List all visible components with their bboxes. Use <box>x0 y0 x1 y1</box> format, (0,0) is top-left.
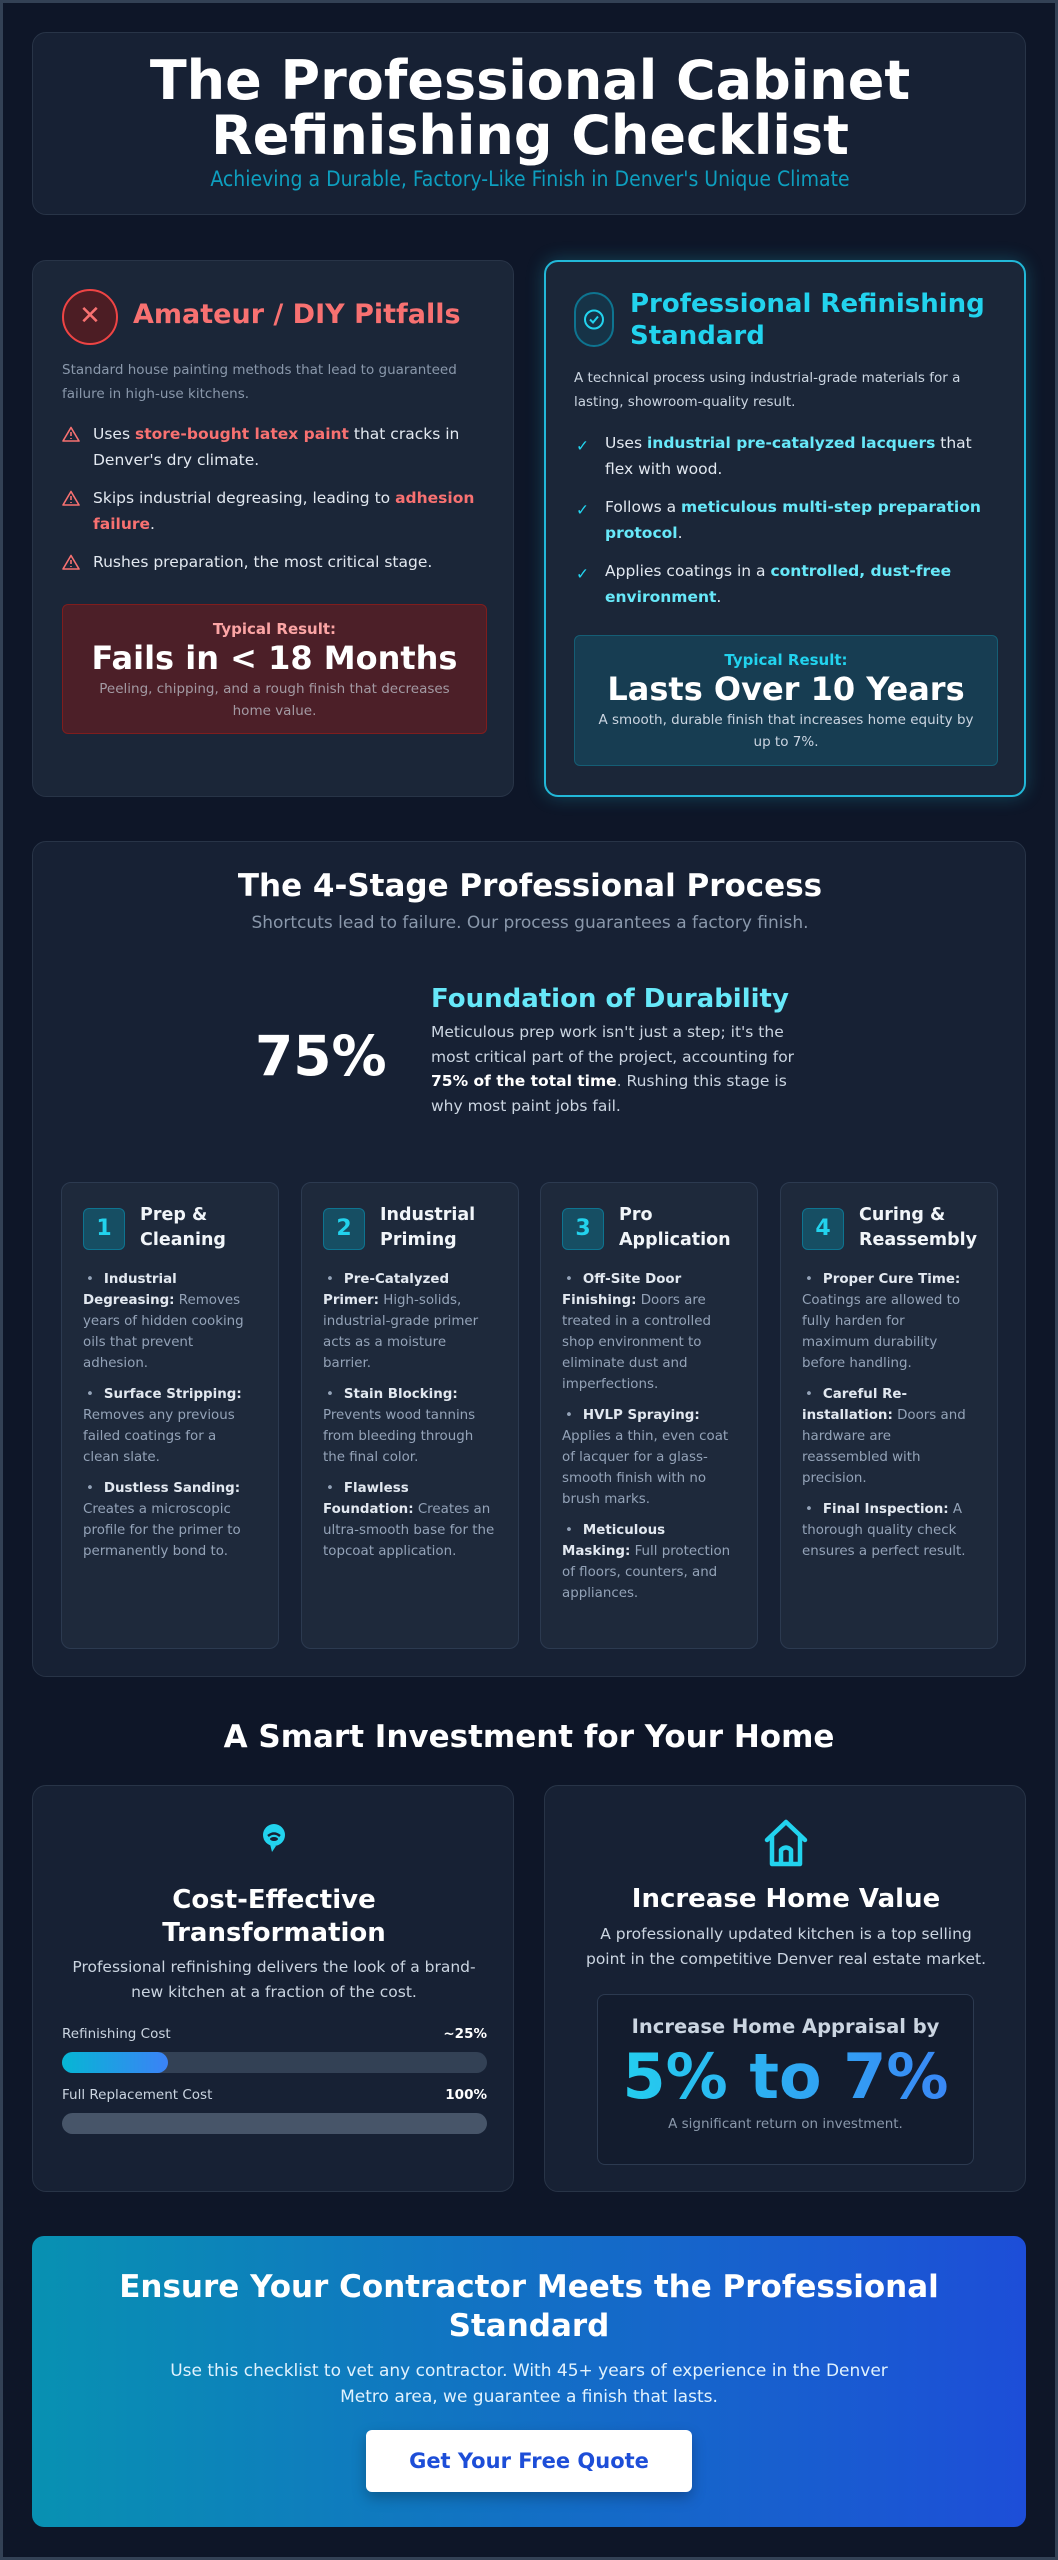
stage 2: Pre-Catalyzed Primer: High-solids, industrial-grade primer acts as a moisture barrier. <box>323 1272 478 1371</box>
heading: Increase Home Value <box>632 1884 940 1914</box>
stage 3: Application <box>619 1230 731 1250</box>
callout: fails: Fails in < 18 Months <box>92 639 457 677</box>
list: standards: ✓ <box>576 437 589 455</box>
list: pitfalls: Uses store-bought latex paint that cracks in Denver's dry climate. <box>93 425 459 469</box>
bar chart <box>62 2026 487 2134</box>
description: Professional refinishing delivers the look of a brand-new kitchen at a fraction of the cost. <box>72 1958 476 2001</box>
button <box>366 2430 692 2492</box>
bar chart: Refinishing Cost <box>62 2026 171 2042</box>
icon: check <box>574 292 614 347</box>
bar chart: Full Replacement Cost <box>62 2087 212 2103</box>
title: The Professional Cabinet <box>150 49 910 112</box>
description: A technical process using industrial-grade materials for a lasting, showroom-quality result. <box>574 370 960 410</box>
stage 2 <box>301 1182 519 1649</box>
heading: Professional Refinishing Standard <box>630 289 985 351</box>
list: standards: ✓ <box>576 501 589 519</box>
header card <box>32 32 1026 215</box>
stage 4: Reassembly <box>859 1230 977 1250</box>
stage 1: 1 <box>96 1216 112 1241</box>
callout: appraisal <box>597 1994 974 2165</box>
panel: amateur pitfalls <box>32 260 514 797</box>
stage 2: 2 <box>336 1216 352 1241</box>
list: standards: ✓ <box>576 565 589 583</box>
description: Use this checklist to vet any contractor. With 45+ years of experience in the Denver Metro area, we guarantee a finish that lasts. <box>170 2361 888 2407</box>
stage 3: Off-Site Door Finishing: Doors are treated in a controlled shop environment to eliminate dust and imperfections. <box>562 1272 711 1392</box>
panel: CTA <box>32 2236 1026 2527</box>
stage 4: Careful Re-installation: Doors and hardware are reassembled with precision. <box>802 1387 966 1486</box>
stage 4: Proper Cure Time: Coatings are allowed to fully harden for maximum durability before handling. <box>802 1272 960 1371</box>
list: standards: Uses industrial pre-catalyzed lacquers that flex with wood. <box>605 434 972 478</box>
description: point in the competitive Denver real estate market. <box>586 1950 986 1968</box>
heading: Ensure Your Contractor Meets the Professional Standard <box>119 2269 939 2344</box>
panel: professional standard <box>544 260 1026 797</box>
stage 4: 4 <box>815 1216 831 1241</box>
panel: cost-effective <box>32 1785 514 2192</box>
callout: appraisal: Increase Home Appraisal by <box>632 2015 939 2038</box>
heading: investment: A Smart Investment for Your Home <box>224 1719 834 1755</box>
icon: x circle <box>62 289 118 345</box>
bar chart: ~25% <box>443 2026 487 2042</box>
heading: Transformation <box>162 1918 386 1948</box>
panel: 4-stage process <box>32 841 1026 1677</box>
callout: appraisal: 5% to 7% <box>623 2040 948 2113</box>
callout: fails: Peeling, chipping, and a rough finish that decreases home value. <box>99 681 450 719</box>
subtitle: Achieving a Durable, Factory-Like Finish in Denver's Unique Climate <box>210 167 850 191</box>
stage 3: HVLP Spraying: Applies a thin, even coat of lacquer for a glass-smooth finish with no brush marks. <box>562 1408 728 1507</box>
callout: lasts: A smooth, durable finish that increases home equity by up to 7%. <box>598 712 974 750</box>
callout: fails <box>62 604 487 734</box>
stage 3: 3 <box>575 1216 591 1241</box>
icon: house <box>764 1820 808 1866</box>
callout: fails: Typical Result: <box>213 620 336 638</box>
list: standards <box>576 434 981 606</box>
heading: Cost-Effective <box>172 1885 376 1915</box>
callout: lasts: Typical Result: <box>724 651 848 669</box>
stage 2: Stain Blocking: Prevents wood tannins from bleeding through the final color. <box>323 1387 475 1465</box>
stage 1 <box>61 1182 279 1649</box>
icon: x circle: ✕ <box>79 301 101 331</box>
button: Get Your Free Quote <box>409 2449 649 2473</box>
description: A professionally updated kitchen is a top selling <box>600 1925 972 1943</box>
description <box>586 1925 986 1968</box>
list: pitfalls: Skips industrial degreasing, leading to adhesion failure. <box>93 489 474 533</box>
stage 4 <box>780 1182 998 1649</box>
bar chart: 100% <box>445 2087 487 2103</box>
stage 2: Flawless Foundation: Creates an ultra-smooth base for the topcoat application. <box>323 1481 494 1559</box>
callout: appraisal: A significant return on investment. <box>668 2116 903 2132</box>
subtitle: Shortcuts lead to failure. Our process guarantees a factory finish. <box>251 913 809 933</box>
stage 2: Industrial <box>380 1205 475 1225</box>
title <box>150 49 910 167</box>
text block: foundation: Meticulous prep work isn't just a step; it's the most critical part of the project, accounting for 75% of the total time. Rushing this stage is why most paint jobs fail. <box>431 1023 794 1114</box>
heading <box>162 1885 386 1948</box>
panel: home value <box>544 1785 1026 2192</box>
text block: foundation: Foundation of Durability <box>431 984 789 1014</box>
stage 1: Dustless Sanding: Creates a microscopic profile for the primer to permanently bond to. <box>83 1481 241 1559</box>
stage 3 <box>540 1182 758 1649</box>
stage 1: Cleaning <box>140 1230 226 1250</box>
callout: lasts: Lasts Over 10 Years <box>607 670 965 708</box>
icon: piggy <box>263 1824 285 1852</box>
stage 1: Surface Stripping: Removes any previous failed coatings for a clean slate. <box>83 1387 242 1465</box>
title: Refinishing Checklist <box>211 104 849 167</box>
stage 1: Industrial Degreasing: Removes years of hidden cooking oils that prevent adhesion. <box>83 1272 244 1371</box>
stage 3: Pro <box>619 1205 652 1225</box>
list: standards: Follows a meticulous multi-step preparation protocol. <box>605 498 981 542</box>
stage 3: Meticulous Masking: Full protection of floors, counters, and appliances. <box>562 1523 730 1601</box>
heading: Amateur / DIY Pitfalls <box>133 299 461 330</box>
description: Standard house painting methods that lead to guaranteed failure in high-use kitchens. <box>62 362 457 402</box>
stat: 75%: 75% <box>255 1024 387 1088</box>
stage 2: Priming <box>380 1230 457 1250</box>
stage 1: Prep & <box>140 1205 207 1225</box>
stage 4: Curing & <box>859 1205 945 1225</box>
list: pitfalls: Rushes preparation, the most critical stage. <box>93 553 432 571</box>
callout: lasts <box>574 635 998 766</box>
heading: The 4-Stage Professional Process <box>238 868 822 904</box>
list: standards: Applies coatings in a controlled, dust-free environment. <box>605 562 951 606</box>
list: pitfalls <box>62 425 474 571</box>
stage 4: Final Inspection: A thorough quality check ensures a perfect result. <box>802 1502 966 1559</box>
